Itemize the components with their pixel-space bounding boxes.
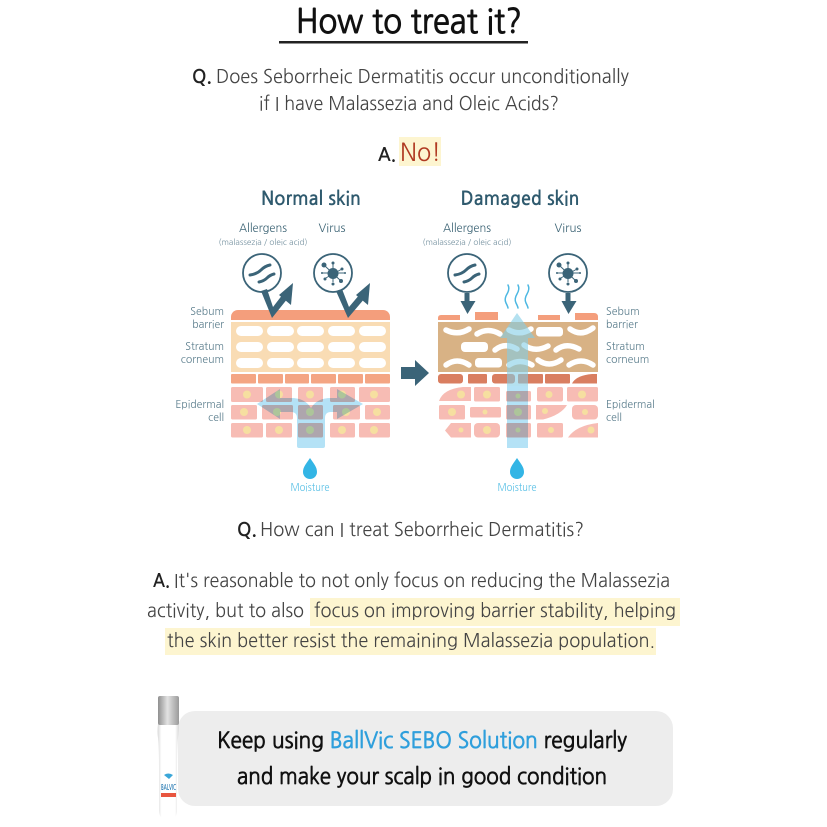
- heading: normal skin: Normal skin: [261, 189, 361, 208]
- callout: keep using product: Keep using BallVic SEBO Solution regularly: [217, 730, 627, 752]
- labels: allergens and virus, damaged: (malassezia / oleic acid): [422, 237, 512, 247]
- broken sebum barrier: [438, 312, 598, 320]
- damaged brick layer: [438, 374, 597, 384]
- answer 1: No: A.: [378, 146, 396, 164]
- skin side labels, damaged: barrier: [606, 319, 638, 330]
- answer 1: No: No!: [400, 140, 441, 165]
- arrow: allergen entering: [460, 293, 476, 314]
- arrow: allergen bounced off barrier: [261, 283, 293, 318]
- product: BallVic bottle: [158, 696, 179, 819]
- labels: allergens and virus: Allergens: [239, 222, 287, 234]
- label: moisture, damaged: Moisture: [498, 482, 537, 493]
- title: How to treat it?: [296, 5, 522, 38]
- brick layer: [231, 374, 390, 384]
- question 1: [192, 67, 629, 113]
- stratum corneum layer: [231, 322, 390, 372]
- skin side labels, damaged: Sebum: [606, 306, 640, 317]
- arrow: normal to damaged: [401, 360, 429, 386]
- icon: allergens bubble, damaged: [448, 254, 486, 292]
- damaged epidermal cells: [439, 387, 598, 438]
- answer 2: focus on improving barrier stability, helping: [314, 601, 676, 620]
- skin side labels, damaged: corneum: [606, 354, 649, 365]
- answer 2: the skin better resist the remaining Malassezia population.: [167, 631, 655, 650]
- question 1: Does Seborrheic Dermatitis occur unconditionally: [216, 67, 629, 86]
- answer 2: [147, 571, 680, 655]
- labels: allergens and virus, damaged: Virus: [554, 222, 582, 234]
- damaged stratum corneum: [438, 322, 598, 372]
- arrow: moisture retained and spreading sideways: [257, 389, 363, 448]
- product: BallVic bottle: BALVIC: [161, 783, 176, 792]
- answer 2: A.: [153, 572, 170, 590]
- skin side labels: Epidermal: [175, 399, 224, 410]
- panel: damaged skin: [422, 189, 655, 493]
- arrow: virus bounced off barrier: [336, 283, 370, 318]
- labels: allergens and virus: Virus: [318, 222, 346, 234]
- skin side labels: barrier: [192, 319, 224, 330]
- callout: keep using product: [178, 711, 673, 806]
- skin side labels: [175, 306, 224, 423]
- question 1: Q.: [192, 68, 212, 86]
- answer 2: activity, but to also: [147, 601, 304, 620]
- skin side labels: corneum: [181, 354, 224, 365]
- answer 1: No: [378, 137, 441, 166]
- labels: allergens and virus: (malassezia / oleic acid): [218, 237, 308, 247]
- answer 2: It's reasonable to not only focus on reducing the Malassezia: [174, 571, 670, 590]
- icon: virus bubble: [314, 254, 352, 292]
- heading: damaged skin: Damaged skin: [460, 189, 580, 208]
- arrow: virus entering: [562, 293, 576, 314]
- skin side labels: cell: [208, 412, 224, 423]
- skin side labels, damaged: Stratum: [606, 341, 645, 352]
- skin side labels, damaged: Epidermal: [606, 399, 655, 410]
- highlight bands: [165, 598, 680, 655]
- skin side labels: Sebum: [190, 306, 224, 317]
- question 2: How can I treat Seborrheic Dermatitis?: [260, 520, 584, 539]
- icon: moisture drop: [303, 458, 317, 479]
- question 2: Q.: [237, 521, 257, 539]
- icon: steam waves: [505, 285, 529, 308]
- labels: allergens and virus: [218, 222, 346, 247]
- labels: allergens and virus, damaged: [422, 222, 582, 247]
- icon: allergens bubble: [243, 254, 281, 292]
- question 1: if I have Malassezia and Oleic Acids?: [259, 94, 559, 113]
- sebum barrier layer: [231, 310, 390, 320]
- arrow: moisture escaping upward: [500, 313, 535, 448]
- panel: normal skin: [175, 189, 390, 493]
- callout: keep using product: and make your scalp in good condition: [237, 766, 607, 788]
- label: moisture: Moisture: [290, 482, 330, 493]
- skin side labels, damaged: [606, 306, 655, 423]
- icon: virus bubble, damaged: [549, 254, 587, 292]
- skin side labels: Stratum: [185, 341, 224, 352]
- labels: allergens and virus, damaged: Allergens: [443, 222, 491, 234]
- skin side labels, damaged: cell: [606, 412, 622, 423]
- epidermal cells: [231, 387, 390, 438]
- icon: moisture drop, damaged: [510, 458, 524, 479]
